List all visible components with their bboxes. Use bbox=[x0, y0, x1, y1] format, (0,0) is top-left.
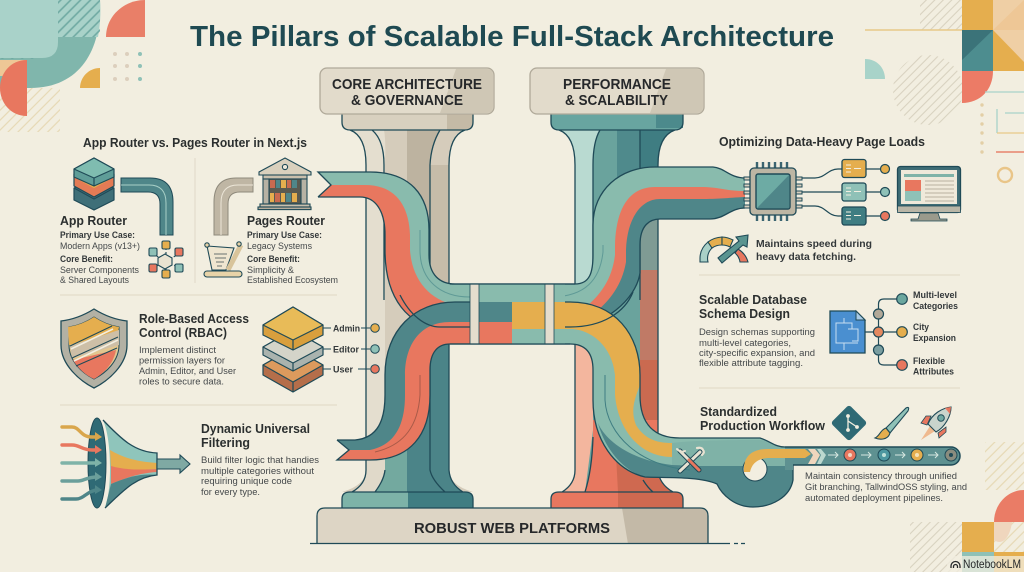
icon: rocket bbox=[921, 407, 951, 440]
icon: shield bbox=[61, 309, 127, 388]
text: app router: & Shared Layouts bbox=[60, 275, 129, 285]
text: app router: Modern Apps (v13+) bbox=[60, 241, 140, 251]
schema tree bbox=[865, 294, 907, 370]
data connectors and modules bbox=[802, 160, 890, 225]
text: schema: flexible attribute tagging. bbox=[699, 358, 803, 368]
speed caption: heavy data fetching. bbox=[756, 251, 856, 263]
pipe: app router bbox=[121, 178, 173, 235]
right pillar: performance and scalability bbox=[551, 114, 683, 508]
text: app router bbox=[60, 214, 140, 285]
icon: paint brush bbox=[875, 407, 909, 439]
icon: scroll bbox=[204, 242, 242, 277]
heading: Production Workflow bbox=[700, 419, 825, 433]
panel: scalable database schema design bbox=[699, 290, 958, 376]
schema labels bbox=[913, 290, 958, 376]
text: filtering bbox=[201, 422, 320, 497]
left pillar: core architecture bbox=[342, 114, 473, 508]
text: schema bbox=[699, 293, 815, 368]
upper ribbon bbox=[318, 167, 745, 327]
base: robust web platforms bbox=[310, 508, 745, 544]
schema labels: Expansion bbox=[913, 333, 956, 343]
panel: standardized production workflow bbox=[700, 405, 967, 503]
text: rbac bbox=[139, 312, 249, 386]
text: rbac: permission layers for bbox=[139, 356, 225, 366]
text: pages router: Pages Router bbox=[247, 214, 325, 228]
text: rbac: roles to secure data. bbox=[139, 376, 224, 386]
text: schema: multi-level categories, bbox=[699, 338, 791, 348]
text: filtering: Dynamic Universal bbox=[201, 422, 310, 436]
text: app router: Core Benefit: bbox=[60, 254, 113, 264]
text: rbac: Admin, Editor, and User bbox=[139, 366, 236, 376]
pillar heading: performance and scalability: PERFORMANCE bbox=[563, 76, 671, 93]
workflow description: automated deployment pipelines. bbox=[805, 493, 943, 503]
heading bbox=[700, 405, 825, 433]
text: schema: Design schemas supporting bbox=[699, 327, 815, 337]
workflow description: Maintain consistency through unified bbox=[805, 471, 957, 481]
speed caption: Maintains speed during bbox=[756, 238, 872, 250]
pillar heading: core architecture and governance: & GOVERNANCE bbox=[351, 92, 463, 109]
icon: processor chip bbox=[744, 162, 802, 221]
role legend bbox=[323, 324, 379, 374]
text: pages router: Simplicity & bbox=[247, 265, 294, 275]
text: schema: city-specific expansion, and bbox=[699, 348, 815, 358]
icon: monitor bbox=[898, 166, 960, 221]
text: pages router bbox=[247, 214, 338, 285]
panel: role-based access control bbox=[61, 307, 379, 392]
lower ribbon bbox=[337, 292, 793, 507]
speed caption bbox=[756, 238, 872, 263]
title: The Pillars of Scalable Full-Stack Architecture bbox=[190, 21, 834, 53]
decorative shapes: top left bbox=[0, 0, 145, 132]
text: rbac: Control (RBAC) bbox=[139, 326, 227, 340]
text: filtering: Build filter logic that handies bbox=[201, 455, 320, 465]
heading: Optimizing Data-Heavy Page Loads bbox=[719, 135, 925, 149]
pillar heading: core architecture and governance: CORE ARCHITECTURE bbox=[332, 76, 482, 93]
role legend: Editor bbox=[333, 344, 359, 354]
icon: schema document bbox=[830, 311, 865, 353]
workflow description: Git branching, TallwindOSS styling, and bbox=[805, 482, 967, 492]
text: filtering: for every type. bbox=[201, 487, 260, 497]
schema labels: Flexible bbox=[913, 356, 945, 366]
icon: app router stack bbox=[74, 158, 114, 210]
text: pages router: Primary Use Case: bbox=[247, 230, 322, 240]
text: pages router: Core Benefit: bbox=[247, 254, 300, 264]
text: pages router: Legacy Systems bbox=[247, 241, 312, 251]
text: app router: Primary Use Case: bbox=[60, 230, 135, 240]
icon: permission layers bbox=[263, 307, 323, 392]
watermark: notebooklm bbox=[947, 556, 1024, 572]
icon: library building bbox=[258, 158, 311, 210]
text: schema: Schema Design bbox=[699, 307, 790, 321]
icon: funnel bbox=[62, 418, 190, 508]
text: filtering: multiple categories without bbox=[201, 466, 315, 476]
schema labels: City bbox=[913, 322, 929, 332]
pillar heading: core architecture and governance bbox=[320, 68, 494, 114]
pillar heading: performance and scalability: & SCALABILITY bbox=[565, 92, 668, 109]
text: schema: Scalable Database bbox=[699, 293, 807, 307]
workflow pipeline bar bbox=[744, 447, 960, 472]
panel: app router vs pages router bbox=[60, 136, 338, 285]
decorative shapes: top right bbox=[865, 0, 1024, 182]
pillar heading: performance and scalability bbox=[530, 68, 704, 114]
text: pages router: Established Ecosystem bbox=[247, 275, 338, 285]
text: app router: App Router bbox=[60, 214, 127, 228]
schema labels: Categories bbox=[913, 301, 958, 311]
icon: wrench and screwdriver bbox=[677, 448, 704, 471]
text: filtering: Filtering bbox=[201, 436, 250, 450]
text: rbac: Implement distinct bbox=[139, 345, 217, 355]
text: app router: Server Components bbox=[60, 265, 139, 275]
decorative shapes: bottom right bbox=[910, 442, 1024, 572]
workflow description bbox=[805, 471, 967, 503]
schema labels: Attributes bbox=[913, 366, 954, 376]
schema labels: Multi-level bbox=[913, 290, 957, 300]
bridge between the pillars bbox=[450, 284, 575, 344]
role legend: Admin bbox=[333, 324, 360, 334]
text: rbac: Role-Based Access bbox=[139, 312, 249, 326]
text: filtering: requiring unique code bbox=[201, 476, 292, 486]
base: robust web platforms: ROBUST WEB PLATFORMS bbox=[414, 520, 610, 537]
panel: optimizing data-heavy page loads bbox=[700, 135, 960, 263]
heading: Standardized bbox=[700, 405, 777, 419]
icon: git diamond bbox=[831, 405, 867, 441]
pipe: pages router bbox=[214, 178, 253, 235]
role legend: User bbox=[333, 364, 353, 374]
icon: speed gauge bbox=[700, 235, 748, 263]
icon: component nodes bbox=[149, 241, 183, 278]
heading: App Router vs. Pages Router in Next.js bbox=[83, 136, 307, 150]
panel: dynamic universal filtering bbox=[62, 418, 320, 508]
